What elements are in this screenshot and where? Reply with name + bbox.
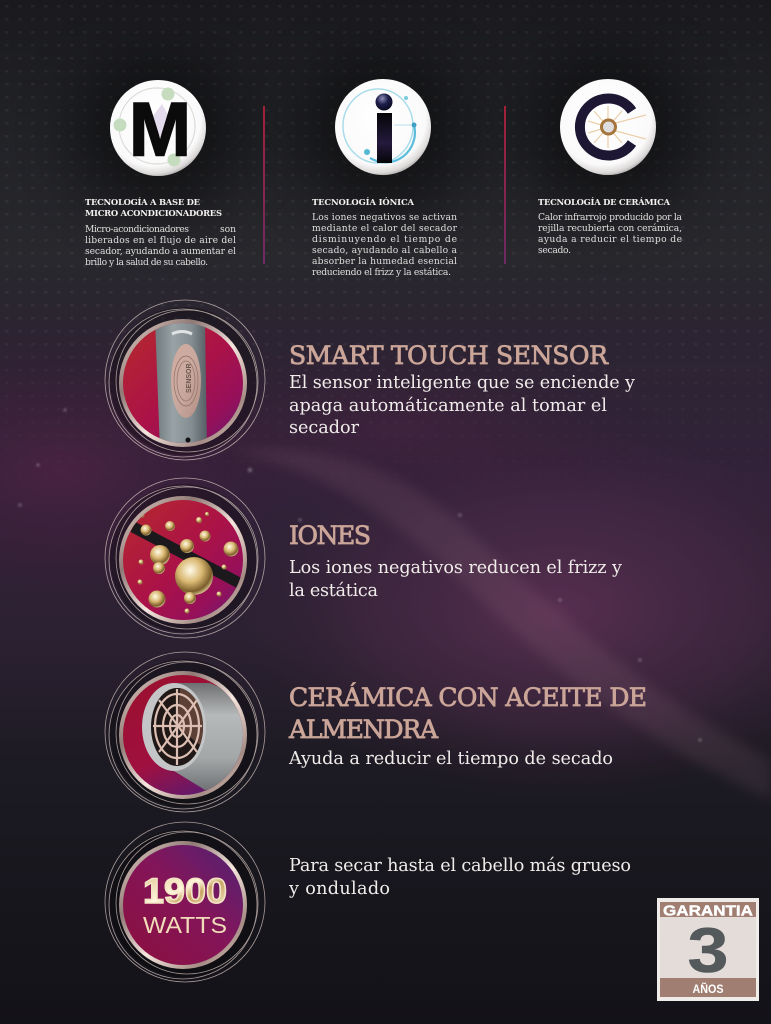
background — [0, 0, 771, 818]
icon: ions — [105, 478, 265, 638]
block: ceramic text: ayuda a reducir el tiempo de — [538, 234, 682, 245]
block: micro conditioners text: MICRO ACONDICIONADORES — [85, 208, 222, 218]
text: iones description: Los iones negativos reducen el frizz y — [289, 558, 622, 578]
heading: smart touch sensor: SMART TOUCH SENSOR — [289, 341, 609, 370]
block: ionic text — [312, 196, 458, 278]
badge: garantia 3 años: GARANTIA — [663, 904, 754, 920]
block: ionic text: Los iones negativos se activan — [312, 212, 457, 223]
block: ionic text: mediante el calor del secador — [312, 223, 458, 234]
divider — [504, 106, 506, 264]
block: micro conditioners text: TECNOLOGÍA A BASE DE — [85, 196, 200, 207]
text: 1900 watts description — [288, 855, 631, 899]
text: 1900 watts description: y ondulado — [288, 879, 390, 899]
block: micro conditioners text: liberados en el flujo de aire del — [85, 235, 236, 246]
block: ionic text: secado, ayudando al cabello a — [312, 245, 458, 256]
block: micro conditioners text — [85, 196, 236, 268]
text: 1900 watts description: Para secar hasta el cabello más grueso — [289, 855, 631, 876]
icon: smart touch sensor: SENSOR — [186, 363, 193, 393]
icon: i ionic — [335, 79, 431, 175]
text: ceramica description: Ayuda a reducir el tiempo de secado — [288, 749, 613, 769]
heading: iones: IONES — [289, 521, 371, 550]
block: ionic text: disminuyendo el tiempo de — [312, 234, 457, 245]
icon: M micro conditioners: M — [129, 88, 191, 172]
block: micro conditioners text: son — [220, 224, 236, 235]
block: micro conditioners text: brillo y la salud de su cabello. — [85, 257, 208, 268]
block: micro conditioners text: secador, ayudando a aumentar el — [85, 246, 236, 257]
badge: garantia 3 años — [657, 898, 759, 1001]
icon: 1900 watts — [105, 822, 265, 982]
heading: ceramica con aceite de almendra: CERÁMICA CON ACEITE DE — [289, 683, 647, 712]
badge: garantia 3 años: 3 — [688, 916, 728, 986]
block: ceramic text: Calor infrarrojo producido por la — [538, 212, 683, 223]
block: ionic text: TECNOLOGÍA IÓNICA — [312, 196, 414, 207]
block: ceramic text — [538, 196, 683, 256]
text: smart touch sensor description — [289, 373, 635, 438]
icon: 1900 watts: WATTS — [143, 912, 227, 938]
block: micro conditioners text: Micro-acondicionadores — [85, 224, 189, 235]
divider — [263, 106, 265, 264]
block: ceramic text: TECNOLOGÍA DE CERÁMICA — [538, 196, 670, 207]
text: smart touch sensor description: El sensor inteligente que se enciende y — [289, 373, 635, 393]
text: iones description: la estática — [289, 580, 378, 601]
badge: garantia 3 años: AÑOS — [692, 981, 724, 996]
icon: 1900 watts: 1900 — [143, 872, 227, 911]
icon: M micro conditioners — [110, 80, 206, 176]
icon: ceramic grille — [105, 652, 265, 812]
block: ceramic text: secado. — [538, 245, 571, 256]
heading: ceramica con aceite de almendra — [288, 683, 647, 744]
block: ceramic text: rejilla recubierta con cerámica, — [538, 223, 682, 234]
block: ionic text: reduciendo el frizz y la estática. — [312, 267, 451, 278]
icon: C ceramic — [560, 79, 656, 175]
block: ionic text: absorber la humedad esencial — [312, 256, 457, 267]
icon: smart touch sensor — [105, 300, 265, 460]
text: smart touch sensor description: apaga automáticamente al tomar el — [289, 395, 607, 416]
text: iones description — [289, 558, 622, 601]
heading: ceramica con aceite de almendra: ALMENDRA — [288, 715, 439, 744]
text: smart touch sensor description: secador — [289, 418, 360, 438]
